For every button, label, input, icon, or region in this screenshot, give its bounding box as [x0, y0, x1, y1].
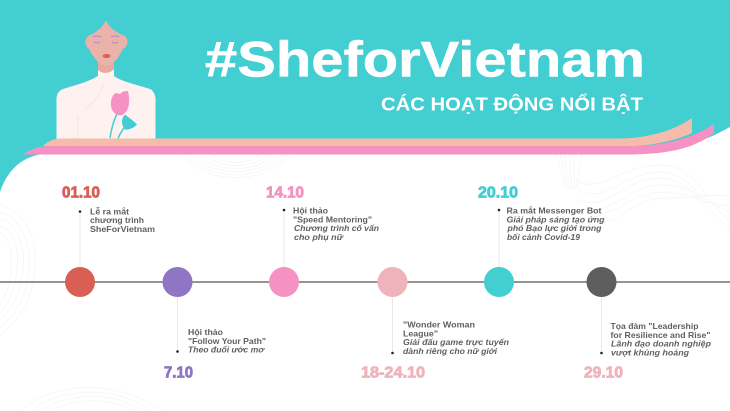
description: Ra mắt Messenger Bot: [506, 204, 602, 216]
description: bối cảnh Covid-19: [507, 232, 580, 242]
illustration: woman holding lotus: [56, 20, 156, 139]
marker dot: [283, 209, 285, 211]
lotus bud: [111, 91, 129, 115]
white dress: [56, 69, 156, 139]
description: Lễ ra mắt: [90, 206, 129, 216]
description: League": [403, 328, 438, 338]
date: 18-24.10: [361, 364, 425, 382]
node: [378, 267, 408, 297]
neck: [98, 58, 114, 74]
description: Tọa đàm "Leadership: [610, 321, 698, 331]
description: vượt khủng hoảng: [611, 348, 689, 358]
date: 7.10: [164, 364, 193, 382]
description: SheForVietnam: [90, 224, 155, 234]
event: 29.10: [584, 267, 711, 382]
description: [90, 206, 155, 234]
lotus leaf: [122, 114, 137, 130]
connector: [283, 210, 285, 267]
description: [506, 204, 604, 242]
description: Hội thảo: [188, 327, 223, 337]
dress fold: [78, 83, 104, 139]
description: [188, 327, 266, 354]
subtitle: CÁC HOẠT ĐỘNG NỔI BẬT: [381, 94, 643, 114]
date: 01.10: [62, 184, 100, 202]
marker dot: [600, 352, 603, 354]
node: [162, 267, 192, 297]
date: 14.10: [266, 184, 304, 202]
node: [484, 267, 514, 297]
title: #SheforVietnam: [205, 32, 645, 88]
description: "Follow Your Path": [188, 336, 266, 346]
connector: [600, 297, 602, 353]
event: 20.10: [478, 184, 604, 297]
timeline axis: [0, 281, 730, 283]
date: 20.10: [478, 184, 518, 202]
lotus stems: [110, 114, 124, 139]
connector: [498, 210, 500, 267]
event: 18-24.10: [361, 267, 509, 382]
event: 01.10: [62, 184, 155, 297]
connector: [79, 212, 81, 267]
description: [403, 320, 509, 356]
connector: [176, 297, 178, 352]
lips: [102, 54, 110, 58]
face and hairline: [85, 20, 127, 66]
description: "Wonder Woman: [403, 320, 475, 330]
description: for Resilience and Rise": [610, 330, 711, 340]
eyes and brows: [93, 36, 119, 43]
node: [586, 267, 616, 297]
node: [269, 267, 299, 297]
description: Chương trình cố vấn: [294, 223, 379, 233]
marker dot: [79, 210, 81, 213]
node: [65, 267, 95, 297]
marker dot: [498, 209, 500, 211]
marker dot: [391, 352, 394, 354]
description: phó Bạo lực giới trong: [506, 223, 602, 233]
marker dot: [176, 350, 179, 353]
date: 29.10: [584, 364, 623, 382]
connector: [392, 297, 394, 353]
description: Giải pháp sáng tạo ứng: [506, 214, 604, 224]
event: 7.10: [162, 267, 266, 382]
description: "Speed Mentoring": [293, 214, 372, 224]
description: Hội thảo: [293, 206, 328, 216]
description: dành riêng cho nữ giới: [403, 346, 498, 356]
description: Giải đấu game trực tuyến: [403, 337, 509, 347]
description: cho phụ nữ: [294, 232, 344, 242]
description: chương trình: [90, 215, 144, 225]
ribbon: pink band: [22, 124, 714, 155]
event: 14.10: [266, 184, 379, 297]
description: [293, 206, 379, 242]
ribbon: peach band: [43, 118, 692, 146]
description: Lãnh đạo doanh nghiệp: [611, 338, 711, 348]
description: Theo đuổi ước mơ: [188, 344, 265, 354]
description: [610, 321, 711, 358]
header: teal background: [0, 0, 730, 192]
background contour patterns: [0, 155, 730, 411]
